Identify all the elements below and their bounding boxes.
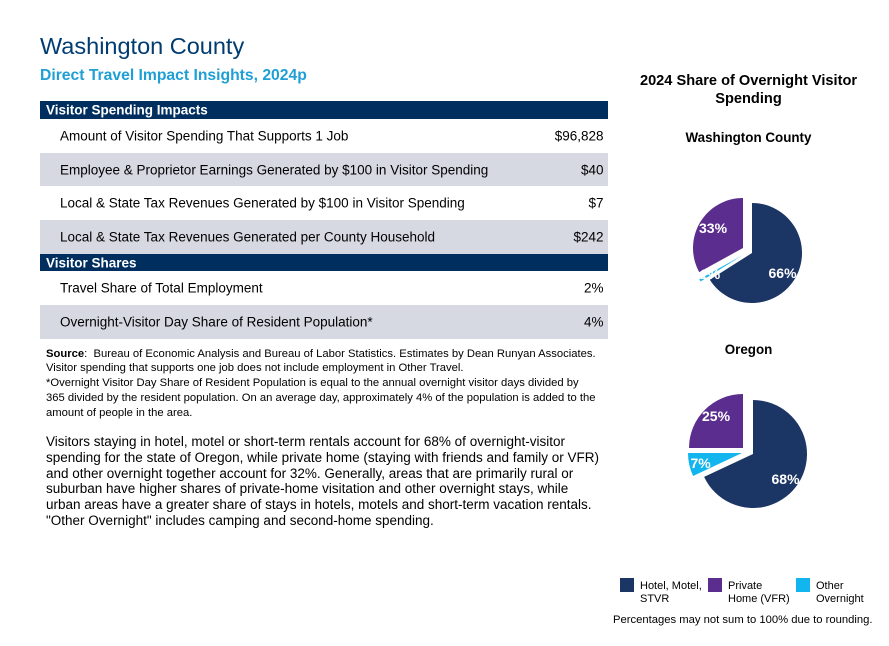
body paragraph: "Other Overnight" includes camping and second-home spending. bbox=[46, 513, 434, 528]
heading: Washington County pie: Washington County bbox=[686, 130, 811, 145]
source note: *Overnight Visitor Day Share of Resident Population is equal to the annual overnight visitor days divided by bbox=[46, 377, 579, 389]
chart title bbox=[640, 73, 857, 107]
row: spending per job: $96,828 bbox=[555, 128, 604, 144]
row: employment share bbox=[60, 280, 604, 296]
pie chart: Washington County: 33% bbox=[699, 220, 728, 236]
legend item: private home: Private bbox=[728, 580, 762, 592]
row: tax revenues per $100: $7 bbox=[588, 196, 604, 210]
legend item: other overnight: Overnight bbox=[816, 593, 864, 605]
body paragraph bbox=[46, 434, 599, 528]
pie chart: Oregon bbox=[688, 394, 807, 508]
row: overnight share: Overnight-Visitor Day Share of Resident Population* bbox=[60, 314, 373, 330]
row: spending per job bbox=[60, 128, 604, 144]
pie chart: Washington County: 66% bbox=[768, 265, 797, 281]
legend bbox=[620, 578, 864, 605]
chart title: 2024 Share of Overnight Visitor bbox=[640, 73, 857, 89]
legend item: other overnight: Other bbox=[816, 580, 844, 592]
heading: visitor shares: Visitor Shares bbox=[46, 255, 137, 270]
heading: visitor spending impacts bbox=[40, 101, 608, 119]
pie chart: Oregon: 7% bbox=[690, 455, 711, 471]
subtitle: Direct Travel Impact Insights, 2024p bbox=[40, 67, 307, 84]
body paragraph: urban areas have a greater share of stays in hotels, motels and short-term vacation rentals. bbox=[46, 497, 592, 512]
title: Washington County bbox=[40, 33, 244, 59]
heading: visitor spending impacts: Visitor Spending Impacts bbox=[46, 102, 208, 118]
legend item: private home bbox=[708, 578, 790, 605]
legend item: private home: Home (VFR) bbox=[728, 593, 790, 605]
rounding note: Percentages may not sum to 100% due to rounding. bbox=[613, 614, 873, 626]
source note: Visitor spending that supports one job does not include employment in Other Travel. bbox=[46, 362, 464, 374]
body paragraph: and other overnight together account for 32%. Generally, areas that are primarily rural or bbox=[46, 466, 573, 481]
legend item: hotel, motel, STVR: STVR bbox=[640, 593, 669, 605]
heading: visitor shares bbox=[40, 254, 608, 271]
source note: 365 divided by the resident population. On an average day, approximately 4% of the population is added to the bbox=[46, 392, 596, 404]
row: spending per job: Amount of Visitor Spending That Supports 1 Job bbox=[60, 128, 348, 144]
pie chart: Washington County bbox=[693, 198, 802, 303]
row: tax revenues per household: $242 bbox=[573, 230, 604, 244]
chart title: Spending bbox=[715, 91, 782, 107]
legend item: other overnight bbox=[796, 578, 864, 605]
row: earnings: $40 bbox=[581, 162, 604, 177]
source note: amount of people in the area. bbox=[46, 407, 192, 419]
legend item: hotel, motel, STVR: Hotel, Motel, bbox=[640, 580, 702, 592]
body paragraph: spending for the state of Oregon, while private home (staying with friends and family or VFR) bbox=[46, 450, 599, 465]
row: employment share: 2% bbox=[584, 280, 604, 296]
row: tax revenues per $100: Local & State Tax Revenues Generated by $100 in Visitor Spending bbox=[60, 196, 465, 210]
row: tax revenues per household bbox=[40, 220, 608, 254]
row: overnight share: 4% bbox=[584, 314, 604, 330]
pie chart: Oregon: 25% bbox=[702, 408, 731, 424]
body paragraph: suburban have higher shares of private-home visitation and other overnight stays, while bbox=[46, 481, 568, 496]
row: overnight share bbox=[40, 305, 608, 339]
row: earnings: Employee & Proprietor Earnings Generated by $100 in Visitor Spending bbox=[60, 162, 488, 177]
heading: Oregon pie: Oregon bbox=[725, 342, 772, 357]
row: earnings bbox=[40, 153, 608, 186]
row: employment share: Travel Share of Total Employment bbox=[60, 280, 263, 296]
row: tax revenues per household: Local & State Tax Revenues Generated per County Household bbox=[60, 230, 435, 244]
legend item: hotel, motel, STVR bbox=[620, 578, 702, 605]
source note: Source: Bureau of Economic Analysis and Bureau of Labor Statistics. Estimates by Dean Runyan Associates. bbox=[46, 348, 596, 360]
body paragraph: Visitors staying in hotel, motel or short-term rentals account for 68% of overnight-visitor bbox=[46, 434, 565, 449]
source note bbox=[46, 348, 596, 419]
pie chart: Washington County: 1% bbox=[700, 266, 721, 282]
panel: impact table bbox=[40, 101, 608, 339]
pie chart: Oregon: 68% bbox=[772, 471, 800, 487]
